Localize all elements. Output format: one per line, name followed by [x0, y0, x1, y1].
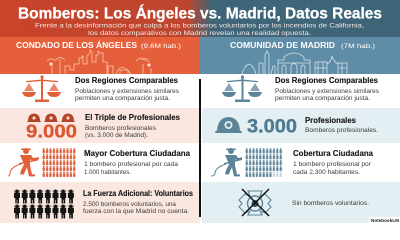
- icon: Los Ángeles skyline: [47, 50, 151, 74]
- text: El Triple de Profesionales: [85, 113, 181, 139]
- chart: people grid right: [245, 148, 283, 178]
- panel: Los Ángeles header: [0, 37, 200, 74]
- subtitle: Frente a la desinformación que culpa a los bomberos voluntarios por los incendios de California,: [35, 22, 364, 30]
- text: Profesionales: Bomberos profesionales.: [305, 127, 378, 134]
- stat: 3.000: 3.000: [247, 116, 297, 138]
- subtitle: [35, 22, 364, 37]
- icon: three helmets: [27, 114, 75, 122]
- icon: Madrid skyline: [242, 51, 347, 74]
- text: La Fuerza Adicional: [83, 189, 193, 215]
- panel: Madrid header: (7M hab.): [341, 43, 375, 50]
- badge: NotebookLM: [369, 217, 400, 223]
- text: La Fuerza Adicional: La Fuerza Adicional: Voluntarios: [83, 189, 193, 198]
- text: Dos Regiones Comparables right: Dos Regiones Comparables: [275, 76, 379, 85]
- icon: firefighter right: [211, 148, 242, 176]
- text: El Triple de Profesionales: Bomberos profesionales: [85, 125, 157, 132]
- text: Cobertura Ciudadana: 1 bombero profesional por: [293, 161, 372, 168]
- text: Dos Regiones Comparables right: permiten una comparación justa.: [275, 95, 370, 102]
- text: Profesionales: [305, 116, 378, 134]
- panel: Madrid header: COMUNIDAD DE MADRID: [230, 41, 335, 50]
- text: Profesionales: Profesionales: [305, 116, 357, 125]
- stat: 9.000: 9.000: [26, 122, 77, 142]
- text: Dos Regiones Comparables left: [75, 76, 180, 102]
- icon: scales left: [22, 75, 61, 102]
- text: El Triple de Profesionales: (vs. 3.000 de Madrid).: [85, 132, 148, 139]
- text: Dos Regiones Comparables right: Poblaciones y extensiones similares: [275, 88, 380, 95]
- text: El Triple de Profesionales: El Triple de Profesionales: [85, 113, 181, 122]
- badge: NotebookLM: NotebookLM: [371, 218, 400, 223]
- text: Sin bomberos voluntarios: Sin bomberos voluntarios.: [292, 200, 369, 207]
- text: Mayor Cobertura Ciudadana: 1.000 habitantes.: [84, 169, 131, 176]
- central divider: [199, 79, 201, 217]
- text: Mayor Cobertura Ciudadana: Mayor Cobertura Ciudadana: [84, 149, 191, 158]
- title: Bomberos: Los Ángeles vs. Madrid, Datos Reales: [18, 6, 382, 22]
- chart: people grid left: [42, 148, 76, 178]
- icon: helmet right: [215, 117, 242, 133]
- text: Cobertura Ciudadana: Cobertura Ciudadana: [293, 149, 374, 158]
- panel: Madrid header: [200, 37, 400, 74]
- text: Dos Regiones Comparables left: Dos Regiones Comparables: [75, 76, 179, 85]
- icon: scales right: [222, 75, 262, 102]
- title band: [0, 0, 400, 37]
- panel: Los Ángeles header: CONDADO DE LOS ÁNGELES: [16, 41, 138, 50]
- text: Dos Regiones Comparables left: Poblaciones y extensiones similares: [75, 88, 180, 95]
- panel: Los Ángeles header: (9,6M hab.): [141, 43, 181, 50]
- subtitle: los datos comparativos con Madrid revelan una realidad opuesta.: [88, 30, 311, 37]
- text: Cobertura Ciudadana: [293, 149, 374, 176]
- icon: firefighter left: [8, 148, 39, 176]
- text: Dos Regiones Comparables right: [275, 76, 380, 102]
- row backgrounds: [0, 74, 400, 223]
- text: Cobertura Ciudadana: cada 2.300 habitantes.: [293, 169, 360, 176]
- icon: crossed-out maltese cross: [239, 189, 271, 216]
- text: Mayor Cobertura Ciudadana: 1 bombero profesional por cada: [84, 161, 178, 168]
- text: La Fuerza Adicional: 2.500 bomberos voluntarios, una: [83, 201, 176, 208]
- text: Mayor Cobertura Ciudadana: [84, 149, 191, 176]
- icon: volunteers: [14, 190, 74, 218]
- text: La Fuerza Adicional: fuerza con la que Madrid no cuenta.: [83, 208, 189, 215]
- text: Dos Regiones Comparables left: permiten una comparación justa.: [75, 95, 170, 102]
